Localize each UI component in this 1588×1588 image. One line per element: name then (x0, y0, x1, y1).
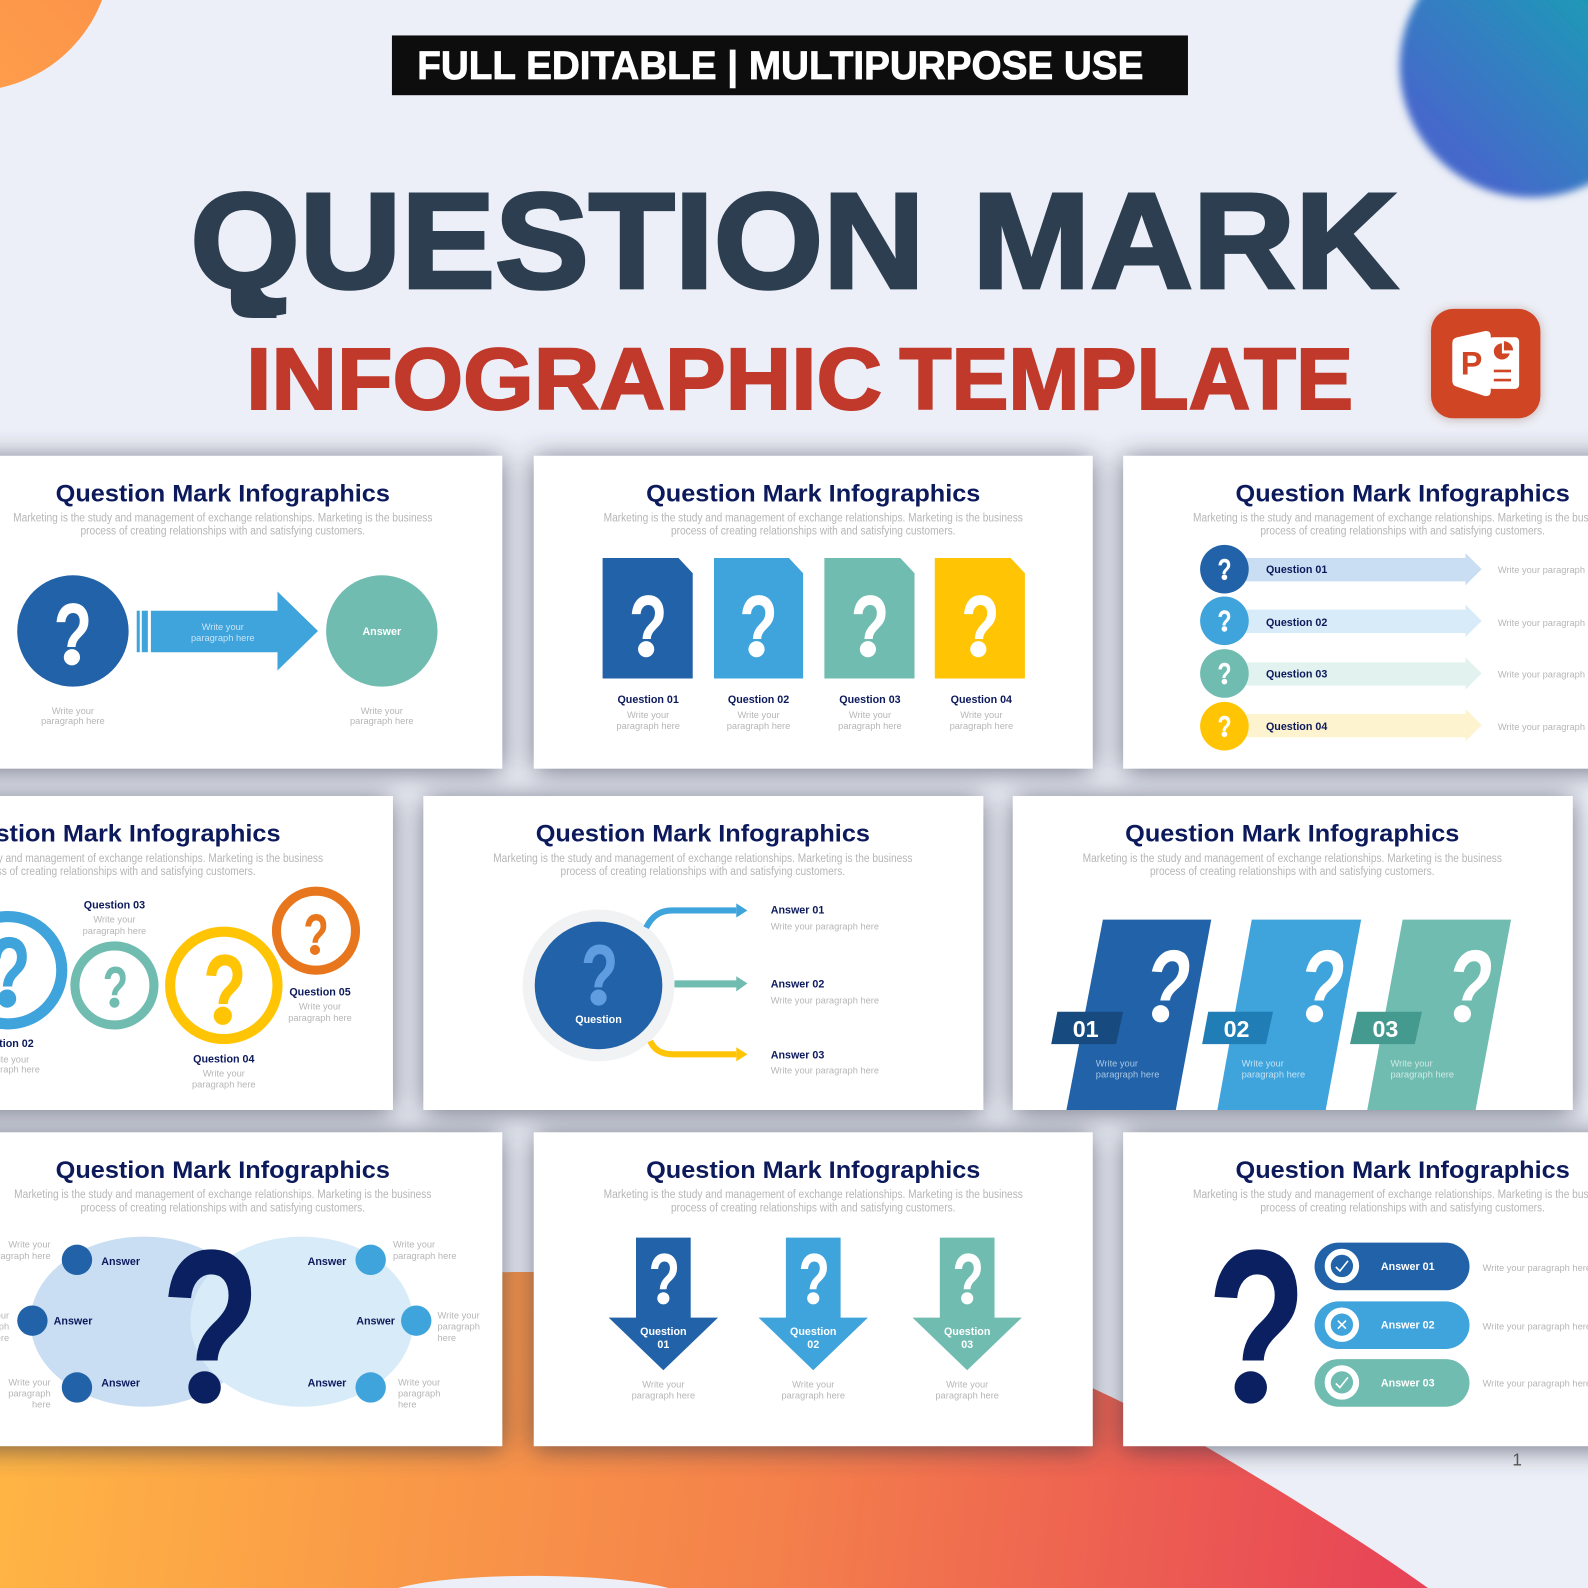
heading: Question Mark Infographics (56, 480, 390, 507)
ring 3 (75, 899, 154, 1025)
subtitle: INFOGRAPHIC (246, 331, 882, 428)
arrow 2: 02 (807, 1339, 819, 1351)
description: Marketing is the study and management of exchange relationships. Marketing is the business (13, 512, 433, 525)
panel: slide 4 ring questions (0, 796, 393, 1110)
document 1 (603, 558, 693, 731)
bottom white arc (398, 1576, 668, 1588)
column 01: ? (1138, 928, 1199, 1044)
caption right: paragraph here (350, 716, 414, 726)
arrow: paragraph here (191, 633, 255, 643)
document 3: paragraph here (838, 721, 902, 731)
arrow 1: paragraph here (632, 1391, 695, 1401)
arrow 2: Question (790, 1326, 836, 1338)
pill 3 (1315, 1359, 1588, 1407)
row 3 (1200, 649, 1588, 698)
document 4: ? (961, 576, 1000, 676)
row 2 (1200, 597, 1588, 645)
caption left (41, 706, 105, 726)
column 01: 01 (1073, 1016, 1099, 1042)
description (1083, 852, 1502, 878)
arrow 3: paragraph here (935, 1391, 999, 1401)
ring 2 (0, 917, 62, 1075)
ring 3: Write your (93, 915, 136, 925)
pill 1: Answer 01 (1381, 1261, 1435, 1273)
arrow 1: Write your (642, 1379, 684, 1389)
ring 4: Question 04 (193, 1053, 255, 1065)
icon: powerpoint: P (1461, 346, 1482, 382)
ring 5 (276, 891, 355, 1023)
column 03 (1350, 920, 1511, 1110)
right answers: Answer (356, 1316, 396, 1328)
column 01: paragraph here (1096, 1070, 1159, 1080)
arrow 2: paragraph here (781, 1391, 845, 1401)
left answers: here (32, 1400, 51, 1410)
ring 3: paragraph here (83, 926, 146, 936)
heading: Question Mark Infographics (646, 1157, 980, 1184)
pill 1: Write your paragraph here (1483, 1263, 1588, 1273)
row 3: ? (1217, 657, 1232, 692)
heading: Question Mark Infographics (1125, 821, 1459, 848)
row 2: Question 02 (1266, 617, 1327, 629)
description (1193, 1188, 1588, 1214)
answer 1: Write your paragraph here (771, 922, 879, 932)
row 4: ? (1217, 709, 1232, 744)
left answers: Write your (8, 1377, 51, 1387)
column 03: paragraph here (1391, 1070, 1454, 1080)
description: process of creating relationships with and satisfying customers. (561, 865, 845, 878)
answer 2: Write your paragraph here (771, 996, 879, 1006)
ring 5: paragraph here (288, 1013, 352, 1023)
description: process of creating relationships with and satisfying customers. (1150, 865, 1435, 878)
question circle: ? (54, 584, 92, 684)
caption left: Write your (52, 706, 94, 716)
document 1: paragraph here (616, 721, 680, 731)
ring 4 (170, 932, 277, 1090)
left answers: Answer (101, 1256, 141, 1268)
ring 3: Question 03 (84, 899, 145, 911)
right answers: Write your (438, 1311, 480, 1321)
document 2: Write your (737, 710, 780, 720)
heading: Question Mark Infographics (536, 821, 870, 848)
row 1: ? (1217, 552, 1232, 587)
document 2: Question 02 (728, 694, 789, 706)
left answers: Answer (54, 1316, 93, 1328)
right answers: here (398, 1400, 417, 1410)
row 4 (1200, 702, 1588, 750)
icon: powerpoint (1431, 309, 1540, 419)
ring 5: Write your (299, 1002, 341, 1012)
ring 4: paragraph here (192, 1080, 256, 1090)
heading: Question Mark Infographics (1236, 1157, 1570, 1184)
caption right (350, 706, 414, 726)
description: process of creating relationships with and satisfying customers. (671, 1201, 956, 1214)
left answers: paragraph (8, 1389, 51, 1399)
arrow (137, 591, 318, 670)
panel: slide 1 question to answer (0, 456, 502, 769)
document 1: ? (629, 576, 667, 676)
banner: FULL EDITABLE | MULTIPURPOSE USE (417, 44, 1143, 88)
ring 4: ? (203, 934, 247, 1047)
column 02: 02 (1224, 1016, 1250, 1042)
arrow 1 (609, 1238, 718, 1401)
right answers: paragraph (438, 1322, 480, 1332)
pill 3: Answer 03 (1381, 1377, 1435, 1389)
arrow 1 (646, 903, 747, 928)
answer 1 (771, 905, 879, 932)
big question mark: ? (1207, 1202, 1307, 1456)
description (14, 1188, 432, 1214)
description: Marketing is the study and management of exchange relationships. Marketing is the business (604, 1188, 1023, 1201)
description: Marketing is the study and management of exchange relationships. Marketing is the business (493, 852, 913, 865)
central circle: ? (581, 928, 618, 1025)
panel: slide 5 question with three answers (423, 796, 983, 1110)
pill 3: Write your paragraph here (1483, 1378, 1588, 1388)
column 01: Write your (1096, 1058, 1138, 1068)
arrow: Write your (202, 622, 244, 632)
answer circle (326, 575, 438, 687)
arrow 1: 01 (657, 1339, 669, 1351)
arrow 1: Question (640, 1326, 687, 1338)
heading: Question Mark Infographics (56, 1157, 390, 1184)
document 2 (714, 558, 803, 731)
big question mark (1214, 1249, 1298, 1404)
column 02: ? (1292, 928, 1353, 1044)
column 02 (1202, 920, 1361, 1110)
ring 3: ? (103, 956, 128, 1021)
right answers: here (438, 1333, 456, 1343)
pill 2: Write your paragraph here (1483, 1322, 1588, 1332)
description: process of creating relationships with and satisfying customers. (1260, 525, 1545, 538)
document 1: Write your (627, 710, 669, 720)
card shadows (0, 458, 1588, 1449)
subtitle: TEMPLATE (899, 331, 1353, 428)
column 03: 03 (1372, 1016, 1398, 1042)
arrow 3: Write your (946, 1379, 988, 1389)
caption left: paragraph here (41, 716, 105, 726)
column 02: paragraph here (1242, 1070, 1305, 1080)
main title (190, 165, 1398, 318)
description (604, 1188, 1023, 1214)
description: process of creating relationships with and satisfying customers. (671, 525, 956, 538)
central circle: Question (575, 1014, 622, 1026)
arrow 3: 03 (961, 1339, 973, 1351)
column 03: Write your (1391, 1058, 1433, 1068)
answer 1: Answer 01 (771, 905, 824, 917)
row 2: ? (1217, 604, 1232, 639)
arrow 2 (759, 1238, 868, 1401)
central circle (523, 909, 674, 1061)
left answers: Write your (8, 1240, 51, 1250)
left answers (0, 1240, 141, 1410)
question circle (17, 575, 129, 687)
row 3: Question 03 (1266, 669, 1327, 681)
arrow 2 (674, 976, 747, 991)
arrow 3 (912, 1238, 1022, 1401)
subtitle (246, 331, 1353, 428)
main title: MARK (972, 165, 1398, 317)
description: process of creating relationships with and satisfying customers. (81, 525, 365, 538)
answer 3: Write your paragraph here (771, 1066, 879, 1076)
ring 4: Write your (203, 1069, 245, 1079)
right answers (308, 1240, 480, 1410)
description (604, 512, 1023, 538)
description: Marketing is the study and management of exchange relationships. Marketing is the business (14, 1188, 432, 1201)
right answers: Answer (308, 1377, 347, 1389)
document 4: paragraph here (950, 721, 1013, 731)
document 2: paragraph here (727, 721, 790, 731)
big question mark: ? (161, 1202, 261, 1456)
document 3: Write your (849, 710, 891, 720)
caption right: Write your (361, 706, 403, 716)
answer circle: Answer (362, 626, 402, 638)
answer 3 (771, 1049, 879, 1076)
document 2: ? (739, 576, 778, 676)
panel: slide 8 down arrows (534, 1132, 1093, 1446)
panel: slide 3 arrow list (1123, 456, 1588, 769)
panel: slide 7 overlapping ovals (0, 1132, 502, 1456)
decorative orange circle top-left (0, 0, 111, 91)
column 03: ? (1440, 928, 1501, 1044)
description (13, 512, 433, 538)
arrow 2: Write your (792, 1379, 834, 1389)
page number: 1 (1512, 1449, 1522, 1469)
column 01 (1051, 920, 1211, 1110)
description: Marketing is the study and management of exchange relationships. Marketing is the business (604, 512, 1023, 525)
description (493, 852, 913, 878)
left answers: Answer (101, 1377, 141, 1389)
arrow 3 (650, 1041, 747, 1061)
document 3: ? (851, 576, 889, 676)
right answers: paragraph (398, 1389, 440, 1399)
arrow 3: Question (944, 1326, 990, 1338)
description: process of creating relationships with and satisfying customers. (1260, 1201, 1545, 1214)
answer 2: Answer 02 (771, 978, 824, 990)
document 3: Question 03 (839, 694, 901, 706)
banner (392, 35, 1188, 95)
big question mark (168, 1249, 252, 1404)
description (1193, 512, 1588, 538)
right oval (190, 1237, 413, 1407)
document 3 (824, 558, 915, 731)
pill 2: Answer 02 (1381, 1320, 1435, 1332)
heading: Question Mark Infographics (1236, 480, 1570, 507)
row 1: Question 01 (1266, 564, 1327, 576)
arrow 3: ? (952, 1239, 984, 1320)
document 4: Question 04 (951, 694, 1012, 706)
decorative blue circle top-right (1400, 0, 1588, 197)
answer 2 (771, 978, 879, 1006)
row 4: Question 04 (1266, 721, 1327, 733)
right answers: Write your (398, 1377, 440, 1387)
arrow 2: ? (799, 1239, 830, 1320)
document 1: Question 01 (617, 694, 679, 706)
answer 3: Answer 03 (771, 1049, 824, 1061)
arrow 1: ? (649, 1239, 680, 1320)
panel: slide 9 answer pills (1123, 1132, 1588, 1456)
description (0, 852, 323, 878)
panel: slide 2 document cards (534, 456, 1093, 769)
document 4 (935, 558, 1025, 731)
panel: slide 6 slanted columns (1013, 796, 1573, 1110)
description: Marketing is the study and management of exchange relationships. Marketing is the business (1083, 852, 1502, 865)
document 4: Write your (960, 710, 1002, 720)
row 1 (1200, 545, 1588, 593)
main title: QUESTION (190, 165, 925, 317)
pill 1 (1315, 1243, 1588, 1290)
left oval (30, 1237, 257, 1407)
bottom gradient wave (0, 1272, 1428, 1588)
column 02: Write your (1242, 1058, 1284, 1068)
right answers: Answer (308, 1256, 347, 1268)
ring 5: Question 05 (289, 987, 351, 999)
description: process of creating relationships with and satisfying customers. (81, 1201, 365, 1214)
heading: Question Mark Infographics (646, 480, 980, 507)
ring 5: ? (303, 903, 329, 968)
right answers: paragraph here (393, 1251, 457, 1261)
pill 2 (1315, 1301, 1588, 1349)
right answers: Write your (393, 1240, 435, 1250)
